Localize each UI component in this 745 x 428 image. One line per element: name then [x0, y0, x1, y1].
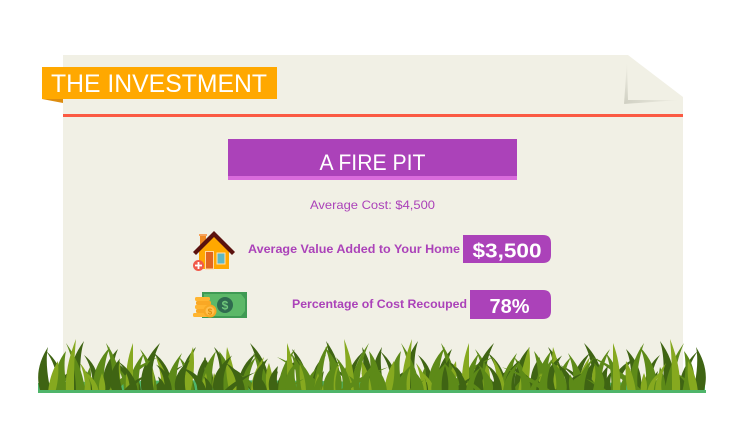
- average cost text: Average Cost: $4,500: [310, 198, 435, 212]
- banner text: A FIRE PIT: [320, 150, 426, 175]
- icon: banknote and coins: $: [222, 298, 229, 312]
- value text: $3,500: [472, 240, 542, 262]
- heading text: THE INVESTMENT: [51, 70, 267, 98]
- label: percentage of cost recouped: Percentage of Cost Recouped: [292, 299, 467, 311]
- icon: house with plus badge: [193, 231, 235, 271]
- label: average value added: Average Value Added to Your Home: [248, 244, 460, 256]
- icon: banknote and coins: [193, 292, 247, 318]
- heading ribbon: [42, 67, 277, 103]
- grass strip: [38, 339, 706, 393]
- title banner: a fire pit: [228, 139, 517, 180]
- heading divider: red line: [63, 114, 683, 117]
- icon: banknote and coins: $: [208, 308, 213, 316]
- value pill: $3,500: [463, 235, 551, 263]
- value text: 78%: [490, 295, 530, 318]
- icon: folded page corner: [624, 61, 680, 104]
- paper panel: [63, 55, 683, 393]
- value pill: 78%: [470, 290, 551, 319]
